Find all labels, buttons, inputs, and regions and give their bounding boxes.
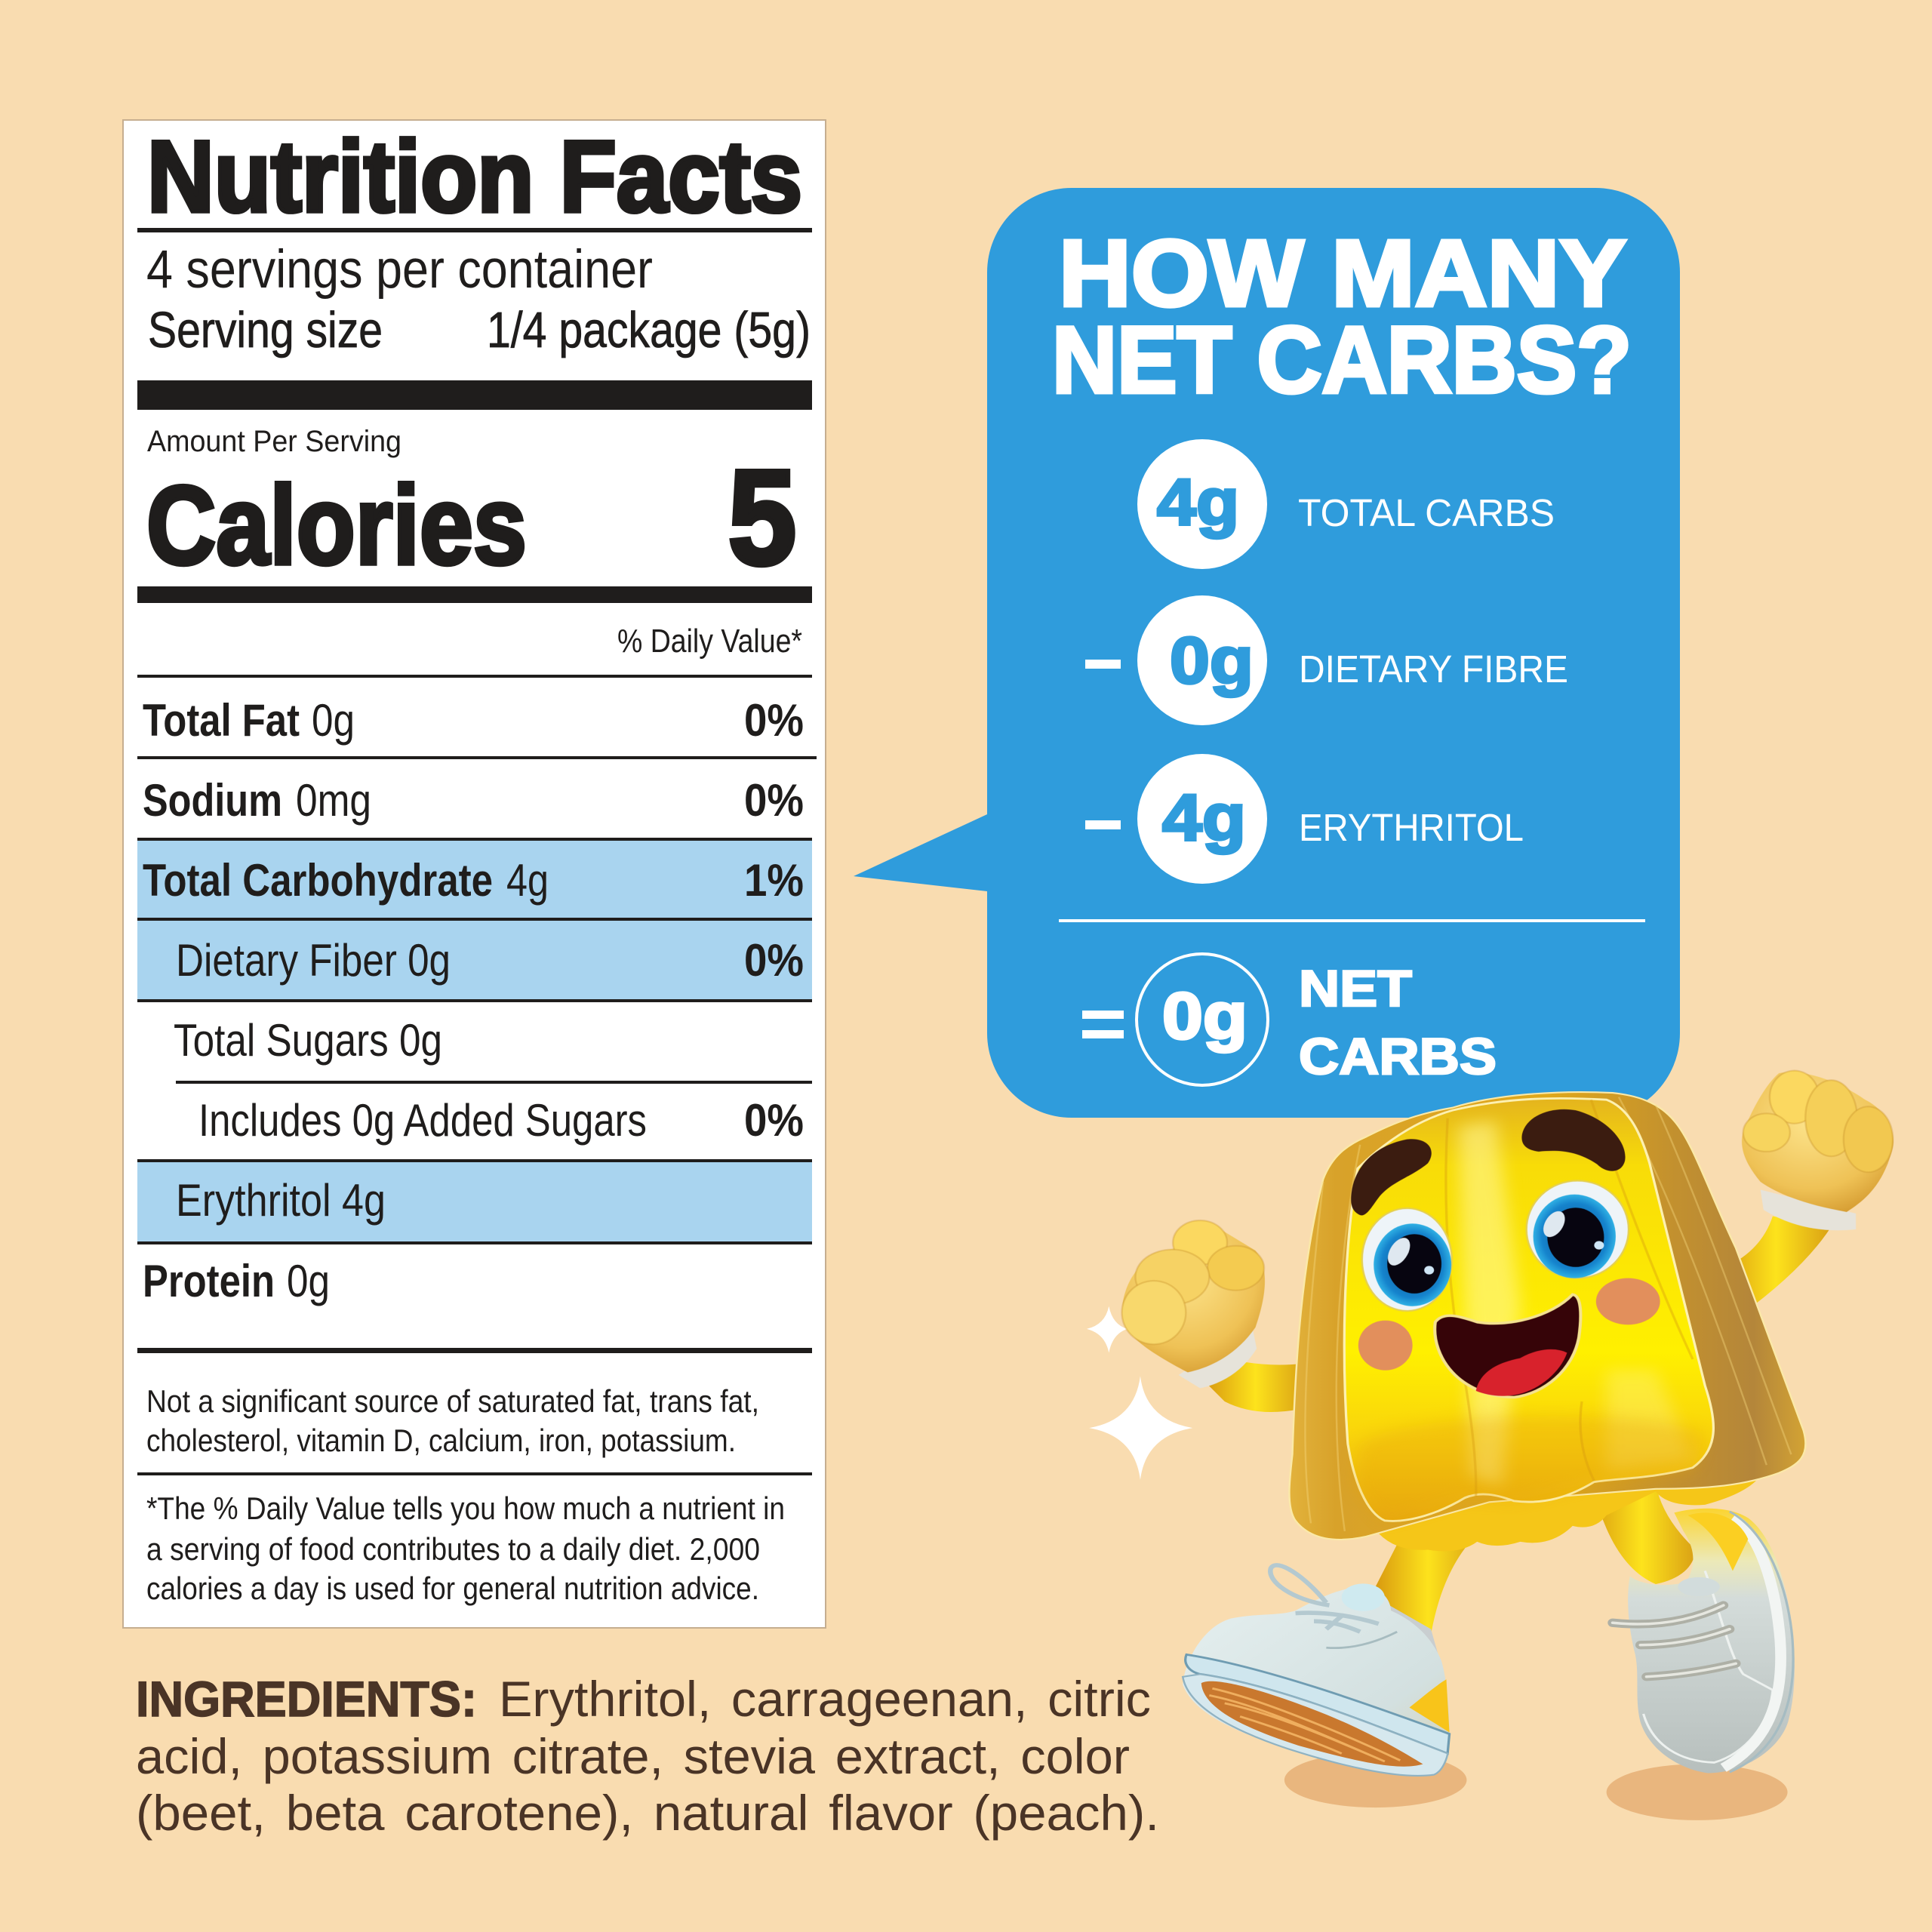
calories xyxy=(146,442,796,592)
dietary fibre row: 0g xyxy=(1170,624,1254,697)
left fist xyxy=(1121,1220,1265,1388)
right eye xyxy=(1527,1180,1629,1278)
dietary fibre row: DIETARY FIBRE xyxy=(1299,648,1568,691)
row: total sugars: Total Sugars 0g xyxy=(174,1015,442,1066)
erythritol row: ERYTHRITOL xyxy=(1299,806,1524,849)
servings per container: 4 servings per container xyxy=(146,240,653,300)
left leg xyxy=(1376,1518,1480,1635)
row: total carbohydrate: Total Carbohydrate xyxy=(143,855,493,906)
ingredients text: acid, potassium citrate, stevia extract, color xyxy=(136,1728,1130,1784)
mouth xyxy=(1435,1294,1580,1397)
eyebrows xyxy=(1351,1109,1626,1215)
note: not a significant source: Not a significant source of saturated fat, trans fat, xyxy=(146,1383,759,1419)
daily value header: % Daily Value* xyxy=(617,623,802,660)
right arm xyxy=(1721,1216,1831,1314)
net carbs result row: CARBS xyxy=(1299,1028,1497,1085)
note: daily value explanation xyxy=(146,1491,785,1606)
row: added sugars: 0% xyxy=(744,1095,804,1146)
bubble heading xyxy=(1052,221,1632,413)
dietary fibre row xyxy=(1085,595,1568,725)
row: sodium: 0% xyxy=(744,775,804,826)
right shoe xyxy=(1613,1509,1795,1773)
calories: 5 xyxy=(728,442,796,592)
right leg xyxy=(1588,1484,1696,1584)
cheeks xyxy=(1358,1278,1660,1371)
ingredients text: INGREDIENTS: xyxy=(136,1671,477,1727)
skirt of jelly xyxy=(1373,1465,1764,1551)
row: total carbohydrate: 4g xyxy=(506,855,549,906)
row: total carbohydrate xyxy=(143,855,804,906)
row: erythritol: Erythritol 4g xyxy=(176,1175,386,1226)
net carbs result row: NET xyxy=(1299,960,1412,1017)
heading: Nutrition Facts: Nutrition Facts xyxy=(147,121,802,233)
bubble heading: NET CARBS? xyxy=(1052,308,1632,413)
total carbs row: 4g xyxy=(1157,466,1239,539)
left eye xyxy=(1362,1208,1452,1311)
row: total fat xyxy=(143,695,804,746)
jelly body front xyxy=(1344,1098,1713,1521)
side pleat ridges xyxy=(1305,1097,1791,1531)
amount per serving: Amount Per Serving xyxy=(147,425,401,458)
net carbs result row: 0g xyxy=(1162,980,1247,1053)
ingredients text xyxy=(136,1671,1159,1841)
row: total fat: 0g xyxy=(312,695,355,746)
row: protein: Protein xyxy=(143,1256,275,1306)
highlighted rows xyxy=(137,839,812,1243)
row: sodium xyxy=(143,775,804,826)
ground shadows xyxy=(1284,1752,1788,1820)
row: dietary fiber: 0% xyxy=(744,935,804,986)
erythritol row xyxy=(1085,754,1524,884)
row: dietary fiber xyxy=(176,935,804,986)
note: daily value explanation: *The % Daily Value tells you how much a nutrient in xyxy=(146,1491,785,1526)
row: total fat: 0% xyxy=(744,695,804,746)
ingredients text: (beet, beta carotene), natural flavor (peach). xyxy=(136,1785,1159,1841)
row: added sugars: Includes 0g Added Sugars xyxy=(198,1095,647,1146)
row: sodium: Sodium xyxy=(143,775,282,826)
row: protein: 0g xyxy=(287,1256,330,1306)
left shoe xyxy=(1183,1565,1450,1776)
net carbs result row xyxy=(1082,954,1497,1085)
total carbs row xyxy=(1137,439,1555,569)
jelly body back layer xyxy=(1289,1092,1805,1540)
row: total fat: Total Fat xyxy=(143,695,300,746)
total carbs row: TOTAL CARBS xyxy=(1298,491,1555,534)
serving size: Serving size xyxy=(148,302,383,358)
note: not a significant source xyxy=(146,1383,759,1458)
mascot: jelly character xyxy=(1087,1071,1894,1820)
panel: net carbs speech bubble xyxy=(854,188,1680,1118)
erythritol row: 4g xyxy=(1162,781,1246,854)
ingredients text: Erythritol, carrageenan, citric xyxy=(499,1671,1151,1727)
row: dietary fiber: Dietary Fiber 0g xyxy=(176,935,451,986)
note: daily value explanation: a serving of food contributes to a daily diet. 2,000 xyxy=(146,1531,760,1567)
sparkles xyxy=(1087,1306,1192,1480)
note: daily value explanation: calories a day is used for general nutrition advice. xyxy=(146,1571,759,1606)
row: sodium: 0mg xyxy=(296,775,371,826)
row: total carbohydrate: 1% xyxy=(744,855,804,906)
bubble heading: HOW MANY xyxy=(1059,221,1626,326)
serving size xyxy=(148,302,811,358)
panel: nutrition facts label xyxy=(123,120,826,1628)
body highlights xyxy=(1459,1121,1693,1486)
right fist xyxy=(1742,1071,1894,1230)
serving size: 1/4 package (5g) xyxy=(487,302,811,358)
note: not a significant source: cholesterol, vitamin D, calcium, iron, potassium. xyxy=(146,1423,736,1458)
left arm xyxy=(1206,1361,1305,1412)
calories: Calories xyxy=(146,463,527,588)
